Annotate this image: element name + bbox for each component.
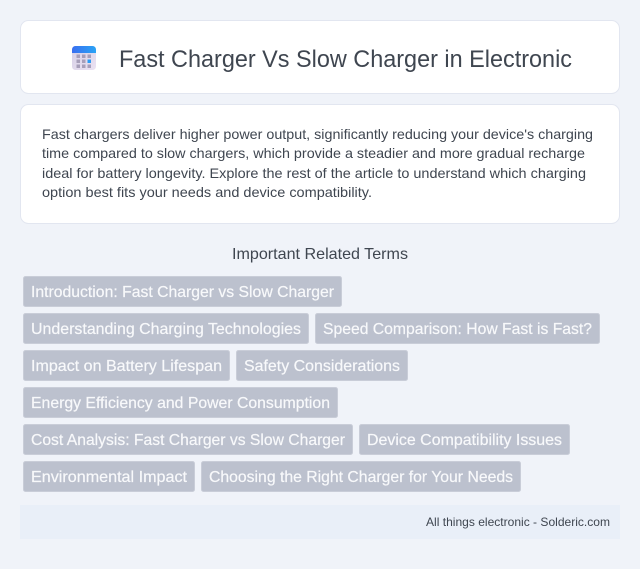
footer	[20, 505, 620, 539]
panel: summary	[20, 104, 620, 224]
icon: calendar	[72, 46, 96, 70]
tag: safety: Safety Considerations	[244, 358, 400, 375]
summary text	[42, 126, 593, 200]
footer text: All things electronic - Solderic.com	[426, 515, 610, 529]
tag: compatibility	[360, 424, 570, 454]
tag: battery lifespan: Impact on Battery Lifespan	[31, 358, 222, 375]
tag: cost analysis	[24, 424, 352, 454]
tag: technologies	[24, 314, 308, 344]
title: Fast Charger Vs Slow Charger in Electronic	[119, 46, 572, 73]
tag: battery lifespan	[24, 350, 230, 380]
tag: safety	[236, 350, 408, 380]
summary text: time compared to slow chargers, which provide a steadier and more gradual recharge	[42, 145, 585, 161]
heading: related terms: Important Related Terms	[232, 246, 408, 263]
tag: compatibility: Device Compatibility Issues	[367, 432, 562, 449]
tag: speed	[316, 314, 600, 344]
tag group: related terms	[24, 276, 600, 492]
tag: energy efficiency	[24, 388, 338, 418]
summary text: Fast chargers deliver higher power output, significantly reducing your device's charging	[42, 126, 593, 142]
tag: environmental	[24, 462, 194, 492]
tag: environmental: Environmental Impact	[31, 469, 188, 486]
tag: introduction	[24, 276, 342, 306]
header card	[20, 20, 620, 94]
tag: choosing	[202, 462, 520, 492]
summary text: option best fits your needs and device compatibility.	[42, 184, 372, 200]
tag: energy efficiency: Energy Efficiency and Power Consumption	[31, 395, 330, 412]
tag: technologies: Understanding Charging Technologies	[31, 321, 301, 338]
tag: speed: Speed Comparison: How Fast is Fast?	[323, 321, 592, 338]
tag: choosing: Choosing the Right Charger for Your Needs	[209, 469, 513, 486]
summary text: ideal for battery longevity. Explore the rest of the article to understand which charging	[42, 165, 586, 181]
tag: cost analysis: Cost Analysis: Fast Charger vs Slow Charger	[31, 432, 346, 449]
tag: introduction: Introduction: Fast Charger vs Slow Charger	[31, 284, 335, 301]
